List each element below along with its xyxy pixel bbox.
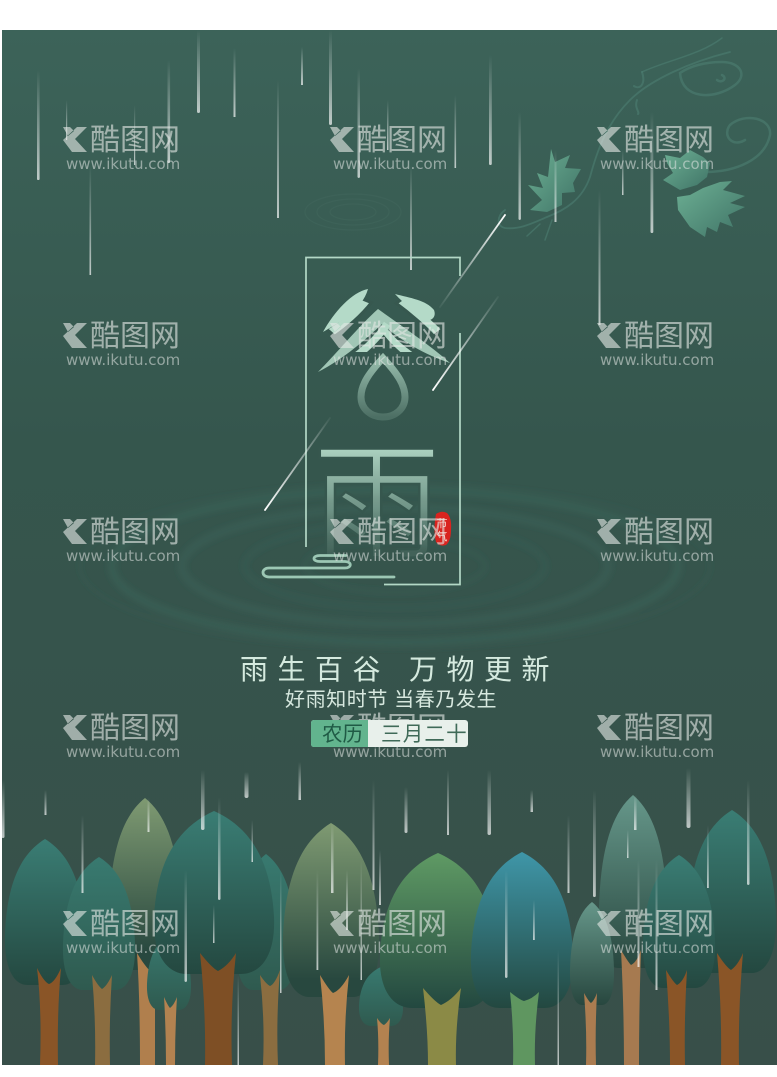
rain: upper streaks (37, 30, 653, 325)
watermark 7: 酷图网 (90, 516, 180, 549)
watermark 1: www.ikutu.com (66, 155, 180, 173)
watermark 7: www.ikutu.com (66, 547, 180, 565)
watermark 12: 酷图网 (90, 908, 180, 941)
leaf: small vine leaf (528, 149, 581, 212)
谷 left leaf stroke (323, 289, 368, 332)
tree: olive back (109, 798, 181, 1065)
watermark 5: 酷图网 (357, 320, 447, 353)
watermark 14 (597, 908, 714, 957)
tree: pale sage (599, 795, 667, 968)
tree: green (380, 853, 496, 1065)
watermark 3: 酷图网 (624, 124, 714, 157)
watermark 13: www.ikutu.com (333, 939, 447, 957)
slogan headline (240, 654, 559, 685)
watermark 13: 酷图网 (357, 908, 447, 941)
poem line: 好雨知时节 当春乃发生 (285, 688, 497, 711)
watermark 4: 酷图网 (90, 320, 180, 353)
diagonal rain lines (265, 215, 505, 510)
watermark 6: 酷图网 (624, 320, 714, 353)
watermark row 4 center, behind date badge: www.ikutu.com (333, 743, 447, 761)
watermark 8 (330, 516, 447, 565)
date badge: 三月二十 (381, 723, 468, 746)
watermark 8: 酷图网 (357, 516, 447, 549)
watermark 6 (597, 320, 714, 369)
watermark 5: www.ikutu.com (333, 351, 447, 369)
date badge: 农历 (322, 723, 363, 746)
tree: teal second (63, 857, 135, 1065)
watermark 10: 酷图网 (90, 712, 180, 745)
watermark 3 (597, 124, 714, 173)
tree: blue (471, 852, 573, 1065)
watermarks (63, 124, 714, 957)
watermark 12: www.ikutu.com (66, 939, 180, 957)
frame around title (306, 258, 460, 584)
watermark 12 (63, 908, 180, 957)
rain: lower streaks (2, 762, 750, 1065)
watermark 11 (597, 712, 714, 761)
watermark 9 (597, 516, 714, 565)
watermark 1: 酷图网 (90, 124, 180, 157)
red seal (434, 512, 451, 546)
watermark 14: www.ikutu.com (600, 939, 714, 957)
watermark row 4 center, behind date badge (330, 712, 447, 761)
谷 upper strokes as text: 谷 (315, 287, 453, 441)
title character: 雨: 雨 (313, 433, 441, 576)
tree: small right (570, 902, 614, 1065)
tree: small left (147, 935, 191, 1065)
red seal: 气 (436, 529, 448, 543)
title character: 谷 (318, 289, 450, 420)
watermark 4: www.ikutu.com (66, 351, 180, 369)
watermark 4 (63, 320, 180, 369)
watermark 1 (63, 124, 180, 173)
vine decoration (499, 38, 770, 240)
谷 inverted-V arms (318, 309, 450, 372)
watermark 9: 酷图网 (624, 516, 714, 549)
cloud ornament (263, 556, 394, 577)
date badge (311, 720, 468, 747)
watermark 3: www.ikutu.com (600, 155, 714, 173)
trunk: pale sage tree (621, 950, 641, 1065)
leaf: rear vine leaf (663, 150, 710, 190)
谷 right leaf stroke (395, 294, 435, 321)
watermark 11: 酷图网 (624, 712, 714, 745)
ripples: small water rings (305, 194, 401, 230)
watermark 13 (330, 908, 447, 957)
watermark 6: www.ikutu.com (600, 351, 714, 369)
watermark 10 (63, 712, 180, 761)
ripples: large water rings (80, 484, 710, 648)
tree: right teal (688, 810, 776, 1065)
watermark 14: 酷图网 (624, 908, 714, 941)
tree: left teal (5, 839, 85, 1065)
leaf: large vine leaf (677, 181, 745, 237)
tree: teal right second (643, 855, 715, 1065)
tree: large teal (154, 811, 274, 1065)
red seal: 节 (436, 517, 448, 530)
tree: teal behind large (236, 854, 296, 1065)
trees: full forest row (5, 795, 776, 1065)
watermark 10: www.ikutu.com (66, 743, 180, 761)
slogan headline: 万物更新 (409, 654, 559, 685)
watermark 2: 酷图网 (357, 124, 447, 157)
watermark 2 (330, 124, 447, 173)
tree: small middle (359, 967, 403, 1065)
tree: olive middle (283, 823, 379, 1065)
watermark 2: www.ikutu.com (333, 155, 447, 173)
watermark 11: www.ikutu.com (600, 743, 714, 761)
watermark 9: www.ikutu.com (600, 547, 714, 565)
watermark 5 (330, 320, 447, 369)
watermark 7 (63, 516, 180, 565)
watermark row 4 center, behind date badge: 酷图网 (357, 712, 447, 745)
谷 drop-shaped mouth (361, 358, 405, 417)
slogan headline: 雨生百谷 (240, 654, 390, 685)
watermark 8: www.ikutu.com (333, 547, 447, 565)
